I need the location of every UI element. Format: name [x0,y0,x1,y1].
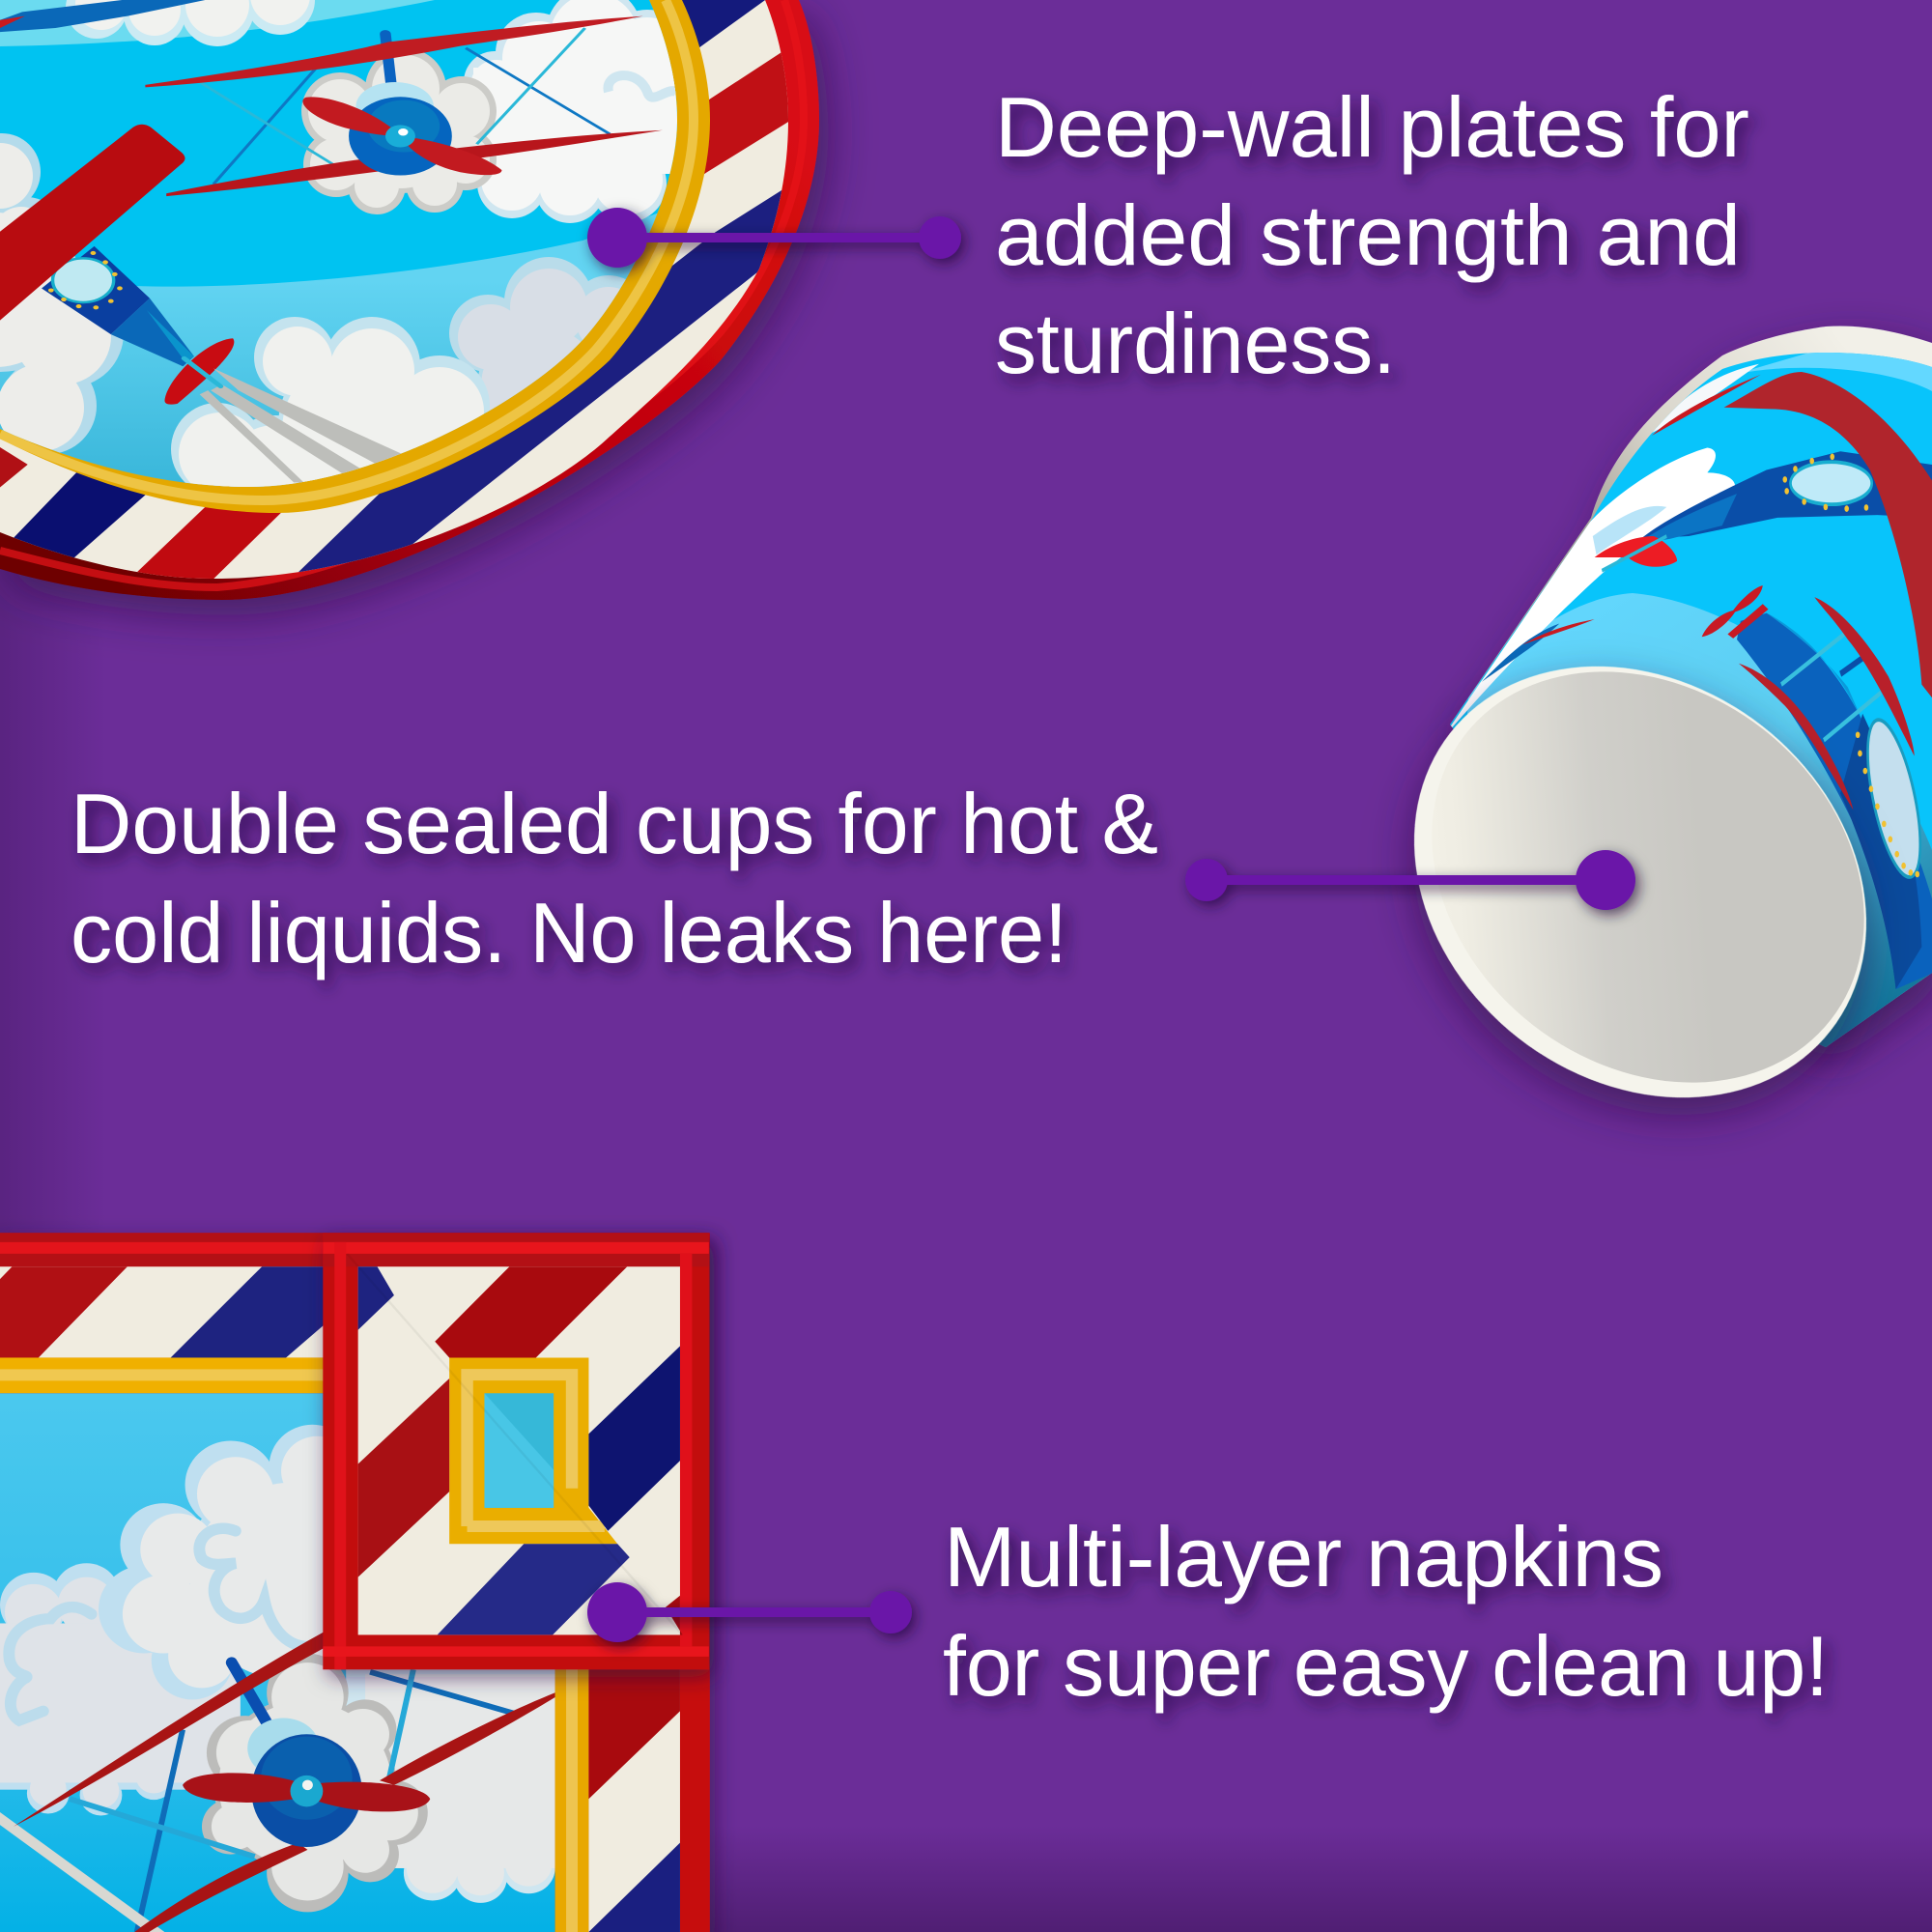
second plane tail rudder [164,338,234,405]
bottom cloud [171,317,490,487]
text: plates [995,79,1749,391]
panel: napkin [0,1233,710,1932]
band stripes [0,0,804,601]
fold crease [347,1254,682,1634]
cup plane 1 wing [1724,372,1932,697]
cup plane 2 propeller [1702,585,1763,637]
flap corner red [435,1266,627,1357]
plate white striped band [0,0,804,601]
napkin plane [0,1631,555,1932]
cup plane 2 wings [1814,597,1915,756]
flap navy right [588,1346,680,1531]
text: napkins: Multi-layer napkins [944,1509,1663,1605]
big cloud [99,1425,394,1699]
plane canopy [247,1719,320,1778]
callout line: cup [1185,850,1635,910]
top light band [1710,348,1932,391]
text: napkins [943,1509,1829,1714]
napkin top border [0,1233,327,1266]
text: cups: Double sealed cups for hot & [71,776,1158,871]
cup rim and silhouette [1450,326,1932,1047]
flap lower stripes [358,1378,449,1577]
plane hub [290,1776,323,1806]
dot: plate anchor [587,208,647,268]
cup plane 2 fuselage [1737,613,1932,989]
text: plates: added strength and [995,187,1741,283]
biplane tail [385,34,391,82]
cup plane 2 window [1857,711,1931,886]
plane lower wings [134,1692,555,1932]
cloud behind biplane [464,0,696,223]
callout line: plate [587,208,961,268]
napkin lower right gold [555,1665,588,1932]
dot: napkin anchor [587,1582,647,1642]
text: cups [71,776,1158,980]
napkin base [0,1233,710,1932]
side wing [0,1815,163,1932]
flap gold frame [449,1357,617,1544]
plane propeller [183,1773,430,1811]
napkin sky [0,1393,555,1932]
biplane engine [349,97,452,176]
cup plane 1 fuselage [1641,451,1932,539]
cloud strip [1441,447,1735,740]
plane tail [232,1662,267,1722]
plate gold ring [0,0,710,513]
plate outer red rim [0,0,819,600]
darker sky band [0,0,696,287]
strut [185,358,220,386]
flap face [358,1266,680,1634]
planes drawn in zoom coordinates [0,0,663,482]
text: plates: sturdiness. [995,296,1396,391]
plate rim highlight [0,0,804,587]
biplane propeller [302,97,501,175]
window dots 2 [1856,731,1919,877]
second plane smoke [200,368,408,482]
small plane at edge [1482,624,1559,682]
cup plane 1 tail [1595,536,1677,567]
second plane fuselage [42,246,150,334]
second plane wing [0,125,185,321]
left cloud [0,133,124,454]
window dots [1782,453,1868,512]
cup plane 1 window [1790,462,1872,504]
light top band [0,0,435,46]
text: cups: cold liquids. No leaks here! [71,885,1067,980]
dot: napkin text end [869,1591,912,1634]
squiggle [609,75,676,98]
biplane upper wing [145,16,643,87]
panel: paper cup [1328,319,1932,1186]
plate artwork [0,0,677,487]
text: napkins: for super easy clean up! [943,1618,1829,1714]
biplane hub [385,125,415,148]
top white sliver [1652,364,1759,433]
plane upper wing [14,1631,327,1827]
plane engine [251,1734,362,1847]
biplane struts [200,28,610,185]
plane struts [137,1672,514,1932]
lower light band [1449,593,1932,1082]
cup body [1430,319,1932,1082]
napkin clouds [0,1425,557,1903]
napkin fold flap [323,1233,709,1669]
cup bottom inner surface [1350,586,1932,1168]
text: plates: Deep-wall plates for [995,79,1749,175]
dot: cup anchor [1576,850,1635,910]
cloud squiggles [9,1528,307,1720]
napkin lower right stripes [588,1665,680,1932]
window [53,258,114,302]
plane grey cloud [202,1654,428,1912]
right cloud [346,1662,557,1903]
bottom right cloud [449,257,626,412]
biplane canopy [356,82,434,130]
gold ring highlight [0,0,694,500]
napkin gold band [0,1357,331,1393]
left cloud [0,1563,241,1815]
cup plane 2 struts [1781,635,1881,740]
window dots [48,251,123,309]
napkin top stripes [0,1266,331,1357]
callout line: napkin [587,1582,912,1642]
flap sky [484,1393,554,1508]
cup bottom outer ellipse [1328,578,1932,1186]
top cloud [66,0,315,46]
dot: cup text end [1185,859,1228,901]
dot: plate text end [919,216,961,259]
biplane lower wing [166,130,663,196]
grey cloud behind biplane [301,48,497,214]
panel: paper plate [0,0,819,601]
top plane [0,0,205,32]
